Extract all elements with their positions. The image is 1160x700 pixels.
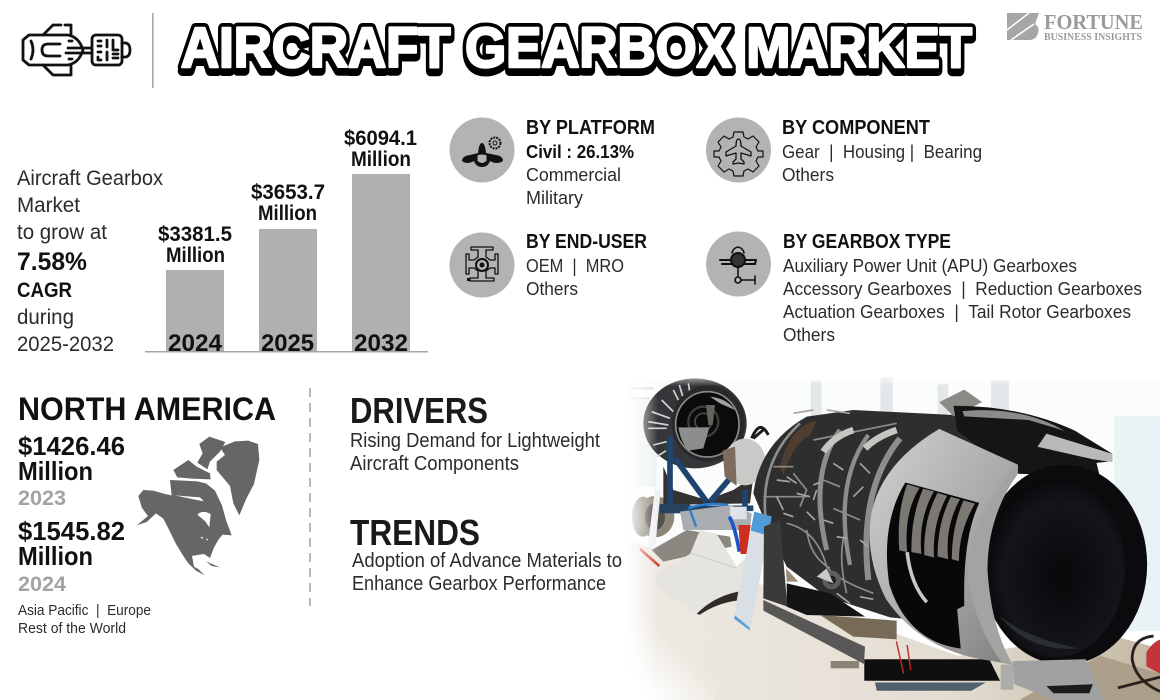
text: by platform: Commercial (526, 165, 621, 185)
text: by component: Gear | Housing | Bearing (782, 142, 982, 162)
header icon: gearbox (23, 25, 130, 75)
text: trends (350, 512, 622, 595)
text: by end-user (526, 231, 647, 299)
text: by platform (526, 117, 655, 208)
white post (648, 488, 661, 550)
logo: Fortune Business Insights (1007, 10, 1143, 43)
regional values: $1426.46 (18, 431, 125, 461)
regional values: 2023 (18, 487, 66, 510)
icon: by platform (450, 118, 514, 182)
text: trends: TRENDS (350, 512, 480, 553)
text: CAGR summary: Market (17, 194, 80, 217)
text: trends: Enhance Gearbox Performance (352, 573, 606, 595)
bar chart: market size: 2024 (168, 330, 223, 357)
text: by gearbox type: Accessory Gearboxes | Reduction Gearboxes (783, 279, 1142, 299)
stand base (864, 659, 1000, 681)
text: by component: BY COMPONENT (782, 117, 930, 139)
text: by gearbox type: Others (783, 325, 835, 345)
silver nacelle (870, 429, 1018, 665)
front lip (1012, 659, 1104, 700)
bar chart: market size: 2032 (354, 330, 408, 357)
regional values: 2024 (18, 573, 66, 596)
icon: by end-user (450, 232, 514, 298)
bar chart: market size: Million (351, 148, 411, 171)
text: by component: Others (782, 165, 834, 185)
text: drivers: Rising Demand for Lightweight (350, 430, 600, 452)
title: AIRCRAFT GEARBOX MARKET (181, 16, 972, 80)
text: CAGR summary: 2025-2032 (17, 333, 114, 356)
regional values: Million (18, 541, 93, 571)
bar chart: market size (145, 127, 428, 357)
engine photograph (618, 370, 1160, 700)
icon: by gearbox type (706, 232, 771, 296)
back engine (643, 378, 747, 468)
stand post and beam (763, 520, 787, 607)
core engine (753, 410, 987, 627)
nacelle and front engine (864, 390, 1160, 700)
header divider (152, 13, 154, 88)
text: by gearbox type (783, 231, 1142, 345)
text: drivers: DRIVERS (350, 390, 488, 431)
blue stand (663, 467, 753, 505)
text: CAGR summary: Aircraft Gearbox (17, 167, 163, 190)
logo: Fortune Business Insights: FORTUNE (1044, 10, 1143, 34)
text: CAGR summary (17, 167, 163, 356)
text: drivers (350, 390, 600, 475)
other regions: Rest of the World (18, 620, 126, 637)
bar chart: market size: Million (258, 202, 317, 225)
bar chart: market size: $3381.5 (158, 223, 232, 246)
title: AIRCRAFT GEARBOX MARKET (181, 16, 972, 80)
other regions: Asia Pacific | Europe (18, 602, 151, 619)
top housing of nacelle (954, 406, 1112, 477)
text: by end-user: BY END-USER (526, 231, 647, 253)
photo fades (618, 370, 658, 700)
text: by gearbox type: Actuation Gearboxes | Tail Rotor Gearboxes (783, 302, 1131, 322)
logo: Fortune Business Insights: BUSINESS INSIGHTS (1044, 32, 1142, 43)
bar chart: market size: $6094.1 (344, 127, 417, 150)
extinguisher (1146, 640, 1160, 674)
hub (724, 439, 766, 485)
left engine details (627, 378, 987, 668)
title: AIRCRAFT GEARBOX MARKET (181, 20, 972, 84)
bar chart: market size: Million (166, 244, 225, 267)
blue gearbox unit (652, 530, 732, 562)
text: by gearbox type: BY GEARBOX TYPE (783, 231, 951, 253)
icon: by component (706, 118, 771, 182)
text: by platform: BY PLATFORM (526, 117, 655, 139)
white panels on floor (655, 530, 747, 614)
bore (981, 465, 1147, 665)
text: by end-user: Others (526, 279, 578, 299)
other regions (18, 602, 151, 637)
louvres (899, 484, 975, 561)
text: by component (782, 117, 982, 185)
text: by gearbox type: Auxiliary Power Unit (APU) Gearboxes (783, 256, 1077, 276)
regional values: $1545.82 (18, 516, 125, 546)
text: CAGR summary: 7.58% (17, 248, 87, 276)
bar chart: market size: $3653.7 (251, 181, 325, 204)
text: by platform: Military (526, 188, 583, 208)
nacelle cut-out (887, 482, 979, 649)
text: CAGR summary: during (17, 306, 74, 329)
text: by platform: Civil : 26.13% (526, 142, 634, 162)
text: CAGR summary: to grow at (17, 221, 107, 244)
heading: north america: NORTH AMERICA (18, 391, 276, 427)
divider: dashed (309, 388, 311, 606)
text: CAGR summary: CAGR (17, 279, 72, 302)
text: drivers: Aircraft Components (350, 453, 519, 475)
info sign (734, 512, 772, 631)
text: by end-user: OEM | MRO (526, 256, 624, 276)
regional values (18, 431, 125, 596)
photo background and ground (621, 377, 1160, 700)
text: trends: Adoption of Advance Materials to (352, 550, 622, 572)
bar chart: market size: 2025 (261, 330, 314, 357)
regional values: Million (18, 456, 93, 486)
map: north america (137, 437, 259, 575)
